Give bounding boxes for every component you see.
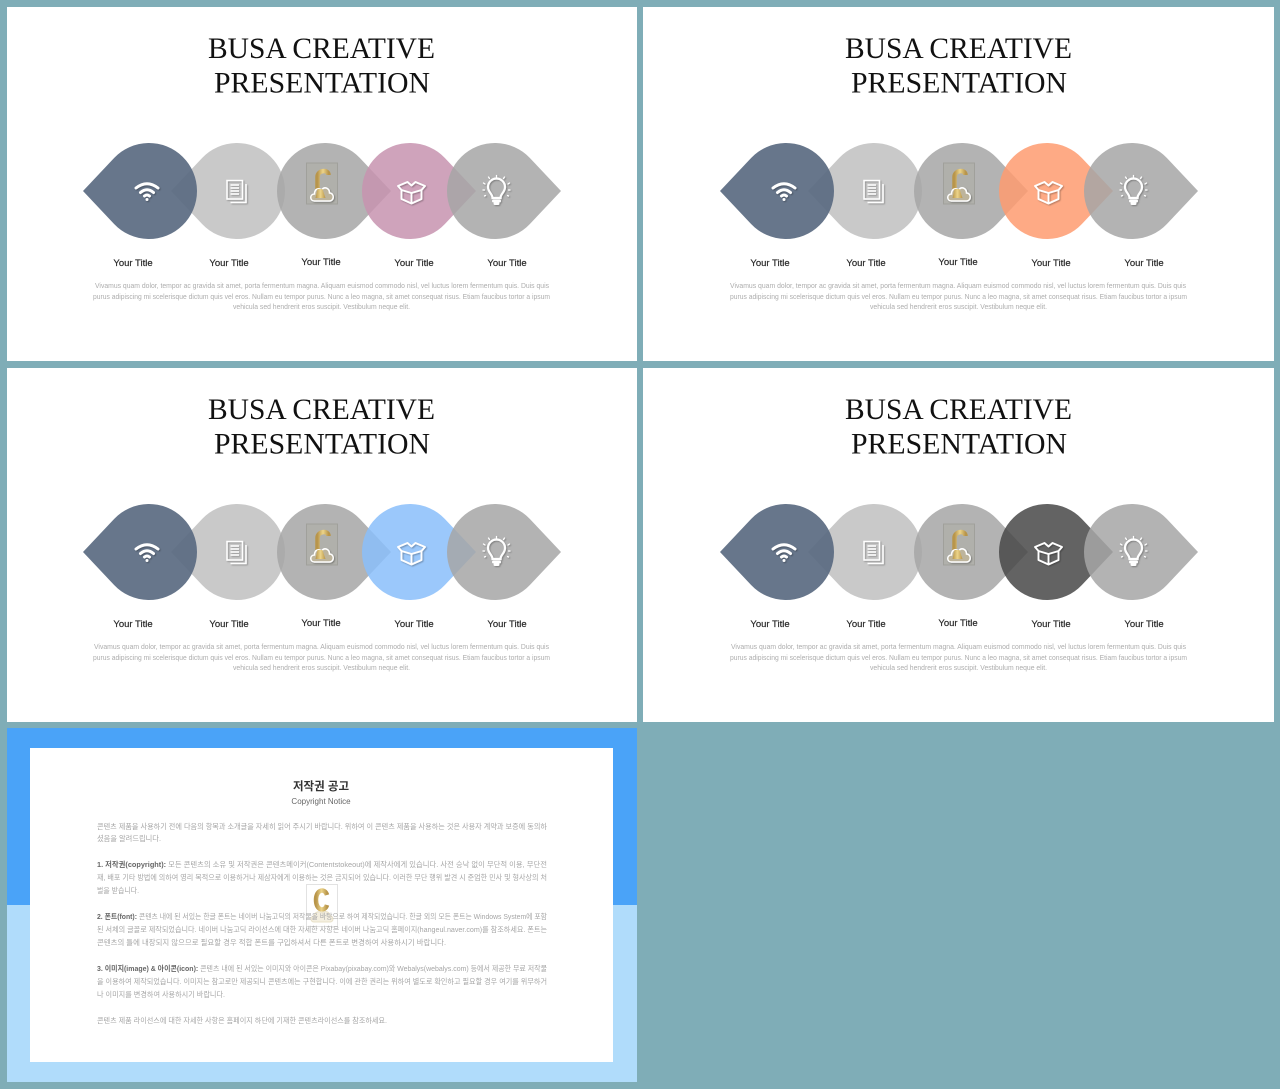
text block: slide 1 body	[93, 281, 550, 311]
heading: slide 2 title	[845, 32, 1072, 100]
labels: slide 4	[750, 618, 1164, 630]
text block: font clause	[97, 911, 547, 947]
icon: wifi	[773, 545, 795, 562]
icon: wifi	[136, 184, 158, 200]
labels: slide 1: Your Title	[301, 257, 341, 268]
labels: slide 2: Your Title	[938, 257, 978, 268]
labels: slide 3: Your Title	[487, 619, 527, 630]
icon: box	[398, 182, 425, 204]
text block: intro: 콘텐츠 제품을 사용하기 전에 다음의 항목과 소개글을 자세히 읽어 주시기 바랍니다. 위하여 이 콘텐츠 제품을 사용하는 것은 사용자 계약과 보증에 동의하	[97, 821, 547, 831]
panel: slide 3 (blue)	[7, 368, 637, 722]
text block: slide 4 body: vehicula sed hendrerit eros suscipit. Vestibulum neque elit.	[870, 663, 1047, 672]
heading: slide 2 title: PRESENTATION	[851, 66, 1067, 100]
icon: box	[398, 543, 425, 564]
labels: slide 2: Your Title	[1031, 258, 1071, 269]
heading: slide 4 title	[845, 393, 1072, 460]
text block: slide 1 body: purus adipiscing mi scelerisque dictum quis vel eros. Nullam eu tempor purus. Nunc a leo magna, sit amet consequat risus. Etiam faucibus tortor a ipsum	[93, 292, 550, 301]
labels: slide 2: Your Title	[750, 258, 790, 269]
icon: gold logo	[944, 163, 974, 204]
heading: slide 4 title: PRESENTATION	[851, 428, 1067, 460]
panel: slide 2 (orange)	[643, 7, 1274, 361]
panel: copyright notice slide	[7, 728, 637, 1082]
text block: slide 1 body: vehicula sed hendrerit eros suscipit. Vestibulum neque elit.	[233, 302, 410, 311]
labels: slide 3	[113, 618, 527, 630]
labels: slide 1: Your Title	[209, 258, 249, 269]
icon: gold C watermark	[306, 884, 338, 926]
text block: slide 4 body: Vivamus quam dolor, tempor ac gravida sit amet, porta fermentum magna. Aliquam euismod commodo nisl, vel luctus lorem fermentum quis. Duis quis	[731, 642, 1186, 651]
heading: slide 1 title: BUSA CREATIVE	[208, 32, 435, 65]
icon: documents	[227, 180, 246, 202]
heading: notice title: 저작권 공고	[293, 779, 349, 793]
chart: slide 2 drop shapes	[720, 143, 1198, 239]
icon: documents	[864, 542, 883, 564]
labels: slide 2: Your Title	[1124, 258, 1164, 269]
icon: box	[1035, 182, 1062, 204]
text block: license note: 콘텐츠 제품 라이선스에 대한 자세한 사항은 홈페이지 하단에 기재한 콘텐츠라이선스를 참조하세요.	[97, 1015, 387, 1025]
labels: slide 1: Your Title	[487, 258, 527, 269]
text block: font clause: 2. 폰트(font): 콘텐츠 내에 된 서있는 한글 폰트는 네이버 나눔고딕의 저작물을 바탕으로 하여 제작되었습니다. 한글 외의 모든 폰트는 Windows System에 포함	[97, 911, 547, 921]
icon: gold logo	[306, 163, 338, 204]
labels: slide 4: Your Title	[1031, 619, 1071, 630]
text block: slide 2 body: vehicula sed hendrerit eros suscipit. Vestibulum neque elit.	[870, 302, 1047, 311]
labels: slide 4: Your Title	[938, 618, 978, 629]
labels: slide 2: Your Title	[846, 258, 886, 269]
text block: copyright clause: 재, 배포 기타 방법에 의하여 영리 목적으로 이용하거나 제삼자에게 이용하는 것은 금지되어 있습니다. 이러한 무단 행위 발견 시 준엄한 민사 및 형사상의 처	[97, 872, 547, 882]
heading: slide 3 title: BUSA CREATIVE	[208, 393, 435, 426]
text block: copyright clause: 1. 저작권(copyright): 모든 콘텐츠의 소유 및 저작권은 콘텐츠메이커(Contentstokeout)에 제작사에게 있습니다. 사전 승낙 없이 무단적 이용, 무단전	[97, 859, 547, 869]
text block: intro: 셨음을 알려드립니다.	[97, 833, 161, 843]
icon: documents	[227, 542, 246, 564]
text block: slide 1 body: Vivamus quam dolor, tempor ac gravida sit amet, porta fermentum magna. Aliquam euismod commodo nisl, vel luctus lorem fermentum quis. Duis quis	[95, 281, 549, 290]
labels: slide 3: Your Title	[209, 619, 249, 630]
labels: slide 2	[750, 257, 1164, 269]
icon: gold logo	[944, 524, 974, 565]
text block: image and icon clause	[97, 963, 547, 999]
panel: slide 4 (dark)	[643, 368, 1274, 722]
text block: slide 2 body	[730, 281, 1187, 311]
text block: font clause: 콘텐츠의 틀에 내장되지 않으므로 필요할 경우 적합 폰트를 구입하셔서 다른 폰트로 변경하여 사용하시기 바랍니다.	[97, 937, 446, 947]
heading: slide 3 title: PRESENTATION	[214, 428, 430, 460]
icon: light bulb	[483, 176, 510, 204]
chart: slide 3 drop shapes	[83, 504, 561, 600]
labels: slide 1: Your Title	[394, 258, 434, 269]
text block: slide 3 body: vehicula sed hendrerit eros suscipit. Vestibulum neque elit.	[233, 663, 410, 672]
text block: slide 4 body: purus adipiscing mi scelerisque dictum quis vel eros. Nullam eu tempor purus. Nunc a leo magna, sit amet consequat risus. Etiam faucibus tortor a ipsum	[730, 653, 1187, 662]
heading: slide 3 title	[208, 393, 435, 460]
subheading: Copyright Notice: Copyright Notice	[291, 797, 351, 806]
text block: slide 3 body: purus adipiscing mi scelerisque dictum quis vel eros. Nullam eu tempor purus. Nunc a leo magna, sit amet consequat risus. Etiam faucibus tortor a ipsum	[93, 653, 550, 662]
text block: intro	[97, 821, 547, 843]
heading: slide 1 title: PRESENTATION	[214, 66, 430, 100]
chart: slide 4 drop shapes	[720, 504, 1198, 600]
labels: slide 3: Your Title	[301, 618, 341, 629]
text block: image and icon clause: 을 이용하여 제작되었습니다. 이미지는 참고로만 제공되니 콘텐츠에는 구현합니다. 이에 관한 권리는 위하여 별도로 확인하고 필요할 경우 여기를 위무하거	[97, 976, 547, 986]
icon: box	[1035, 543, 1062, 564]
icon: gold logo	[306, 524, 338, 565]
text block: slide 3 body	[93, 642, 550, 672]
labels: slide 4: Your Title	[750, 619, 790, 630]
text block: copyright clause	[97, 859, 547, 895]
icon: documents	[864, 180, 883, 202]
labels: slide 1: Your Title	[113, 258, 153, 269]
text block: slide 4 body	[730, 642, 1187, 672]
icon: wifi	[136, 545, 158, 562]
text block: slide 2 body: Vivamus quam dolor, tempor ac gravida sit amet, porta fermentum magna. Aliquam euismod commodo nisl, vel luctus lorem fermentum quis. Duis quis	[730, 281, 1186, 290]
labels: slide 3: Your Title	[394, 619, 434, 630]
panel: slide 1 (pink)	[7, 7, 637, 361]
heading: slide 1 title	[208, 32, 435, 100]
labels: slide 4: Your Title	[846, 619, 886, 630]
icon: light bulb	[1120, 176, 1147, 204]
icon: light bulb	[1120, 536, 1147, 564]
heading: slide 4 title: BUSA CREATIVE	[845, 393, 1072, 426]
heading: slide 2 title: BUSA CREATIVE	[845, 32, 1072, 65]
labels: slide 1	[113, 257, 527, 269]
text block: slide 2 body: purus adipiscing mi scelerisque dictum quis vel eros. Nullam eu tempor purus. Nunc a leo magna, sit amet consequat risus. Etiam faucibus tortor a ipsum	[730, 292, 1187, 301]
text block: slide 3 body: Vivamus quam dolor, tempor ac gravida sit amet, porta fermentum magna. Aliquam euismod commodo nisl, vel luctus lorem fermentum quis. Duis quis	[94, 642, 549, 651]
chart: slide 1 drop shapes	[83, 143, 561, 239]
text block: font clause: 된 서체의 글꼴로 제작되었습니다. 네이버 나눔고딕 라이선스에 대한 자세한 사항은 네이버 나눔고딕 홈페이지(hangeul.naver.com)를 참조하세요. 폰트는	[97, 924, 547, 934]
icon: wifi	[773, 184, 795, 200]
icon: light bulb	[483, 536, 510, 564]
text block: image and icon clause: 나 이미지를 변경하여 사용하시기 바랍니다.	[97, 989, 225, 999]
text block: copyright clause: 벌을 받습니다.	[97, 885, 139, 895]
text block: image and icon clause: 3. 이미지(image) & 아이콘(icon): 콘텐츠 내에 된 서있는 이미지와 아이콘은 Pixabay(pixabay.com)와 Webalys(webalys.com) 등에서 제공한 무료 저작물	[97, 963, 547, 973]
labels: slide 3: Your Title	[113, 619, 153, 630]
labels: slide 4: Your Title	[1124, 619, 1164, 630]
